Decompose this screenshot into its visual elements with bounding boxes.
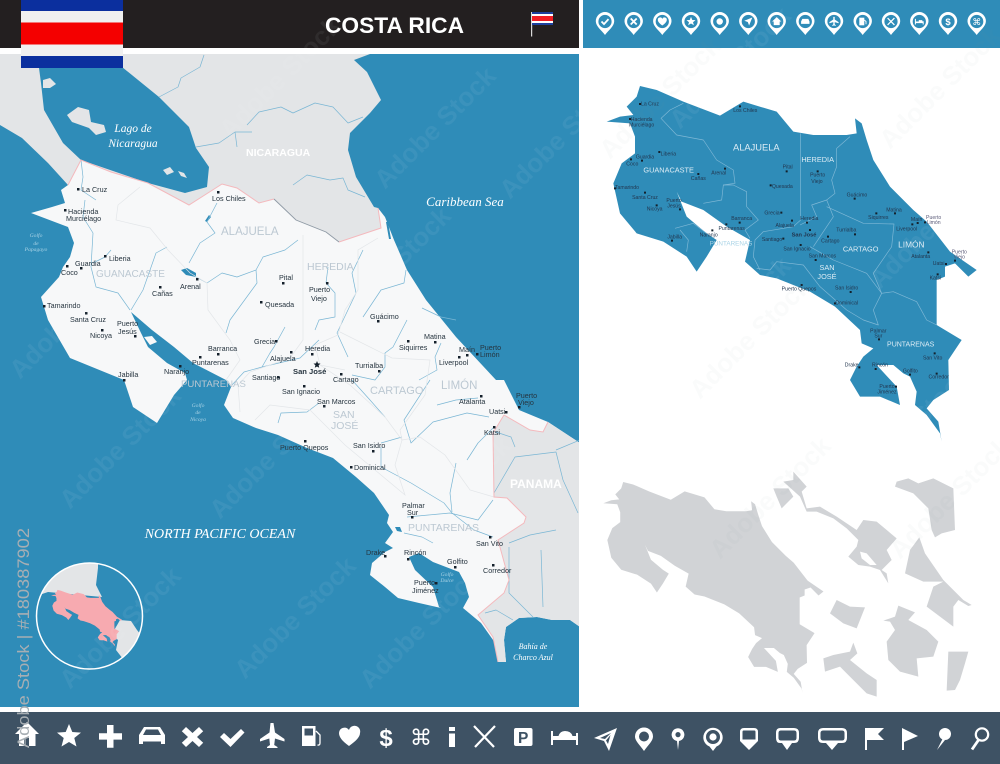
- city labels: Cartago: [821, 238, 840, 244]
- Nicaragua land: [0, 54, 381, 242]
- Rivers: [81, 55, 580, 620]
- city labels: Turrialba: [836, 228, 857, 234]
- City labels: La Cruz: [82, 185, 108, 194]
- City labels: Limón: [480, 350, 500, 359]
- City labels: Palmar: [402, 501, 425, 510]
- Capital star: [314, 361, 320, 368]
- watermark: Adobe Stock: [213, 10, 347, 144]
- city labels: Rincón: [872, 362, 888, 368]
- pin icons row: $: [945, 17, 951, 28]
- city labels: Guácimo: [847, 193, 867, 199]
- Sea labels: [24, 123, 554, 662]
- icon: speech bubble: [776, 728, 799, 750]
- Province labels: ALAJUELA: [221, 226, 279, 238]
- City labels: Atalanta: [459, 397, 485, 406]
- city markers: [614, 103, 956, 388]
- city labels: Liverpool: [896, 226, 917, 232]
- watermark: Adobe Stock: [323, 200, 457, 334]
- City labels: Matina: [424, 332, 446, 341]
- City labels: Jesús: [118, 327, 137, 336]
- city labels: Barranca: [731, 216, 752, 222]
- bottom icon bar: [0, 712, 1000, 764]
- city labels: Puerto: [879, 384, 895, 390]
- city labels: Drake: [845, 362, 859, 368]
- province labels: PUNTARENAS: [710, 241, 752, 248]
- Province labels: PUNTARENAS: [181, 379, 246, 390]
- icon: car: [139, 727, 165, 744]
- City labels: Puerto: [516, 391, 537, 400]
- city labels: Liberia: [661, 151, 676, 157]
- panel: main map: [0, 54, 580, 707]
- Sea labels: Nicaragua: [107, 138, 158, 150]
- icon: home: [15, 722, 39, 746]
- icon: target pin: [703, 728, 723, 751]
- City labels: Turrialba: [355, 361, 383, 370]
- bottom icons row: [15, 722, 988, 752]
- city labels: Quesada: [772, 184, 793, 190]
- City labels: Los Chiles: [212, 194, 246, 203]
- Sea labels: Bahía de: [519, 642, 548, 651]
- city labels: Sur: [874, 333, 883, 339]
- watermark: Adobe Stock: [593, 30, 727, 164]
- City labels: Grecia: [254, 337, 275, 346]
- city labels: [615, 102, 967, 395]
- Small water bodies: [181, 215, 402, 532]
- small flag icon: [531, 12, 553, 36]
- province labels: SAN: [819, 263, 835, 272]
- icon: notched flag: [865, 728, 884, 750]
- Province labels: CARTAGO: [370, 385, 424, 397]
- province borders: [661, 103, 937, 325]
- city labels: Katsi: [930, 276, 941, 282]
- Province labels: LIMÓN: [441, 379, 477, 392]
- city labels: Limón: [927, 220, 941, 226]
- watermark: Adobe Stock: [663, 250, 797, 384]
- panel: blue provinces map: [607, 86, 977, 442]
- watermark: Adobe Stock: [663, 0, 797, 134]
- city labels: Puerto: [666, 198, 682, 204]
- top-right pin bar: [583, 0, 1000, 48]
- Sea labels: Golfo: [441, 571, 454, 578]
- icon: parking: P: [518, 730, 528, 747]
- province labels: GUANACASTE: [643, 166, 694, 175]
- city labels: Pital: [783, 165, 793, 171]
- city labels: Puerto: [952, 249, 967, 255]
- city labels: Atalanta: [911, 254, 930, 260]
- city labels: Golfito: [903, 368, 918, 374]
- city labels: Matina: [886, 207, 902, 213]
- City labels: Santa Cruz: [70, 315, 106, 324]
- pin icons row: [596, 12, 986, 35]
- city labels: Heredia: [800, 216, 818, 222]
- city labels: San José: [792, 232, 816, 238]
- City labels: San Marcos: [317, 397, 356, 406]
- province labels: [643, 143, 935, 349]
- watermark: Adobe Stock: [683, 270, 817, 404]
- city labels: Grecia: [764, 210, 780, 216]
- city labels: Uatsi: [933, 261, 945, 267]
- city labels: Jesús: [667, 203, 681, 209]
- City labels: Liverpool: [439, 358, 469, 367]
- Sea labels: Nicoya: [189, 417, 206, 423]
- city labels: San Vito: [923, 355, 942, 361]
- city labels: Arenal: [711, 171, 726, 177]
- icon: check: [220, 729, 244, 747]
- City labels: Corredor: [483, 566, 512, 575]
- city labels: Los Chiles: [733, 108, 758, 114]
- icon: dollar: $: [379, 725, 393, 752]
- city labels: La Cruz: [641, 102, 659, 108]
- watermark: Adobe Stock: [353, 560, 487, 694]
- City labels: Golfito: [447, 557, 468, 566]
- City labels: Siquirres: [399, 343, 428, 352]
- pin icons row: ⌘: [972, 18, 981, 28]
- city labels: Palmar: [870, 328, 887, 334]
- city labels: Alajuela: [775, 223, 794, 229]
- city labels: Coco: [626, 161, 638, 167]
- city labels: Murciélago: [629, 123, 654, 129]
- Province labels: SAN: [333, 409, 355, 421]
- icon: square pin: [740, 728, 758, 750]
- province labels: JOSÉ: [817, 272, 837, 281]
- City labels: Puerto: [414, 578, 435, 587]
- sea background: [0, 54, 579, 707]
- city labels: Santa Cruz: [632, 195, 658, 201]
- City labels: Hacienda: [68, 207, 98, 216]
- city labels: Hacienda: [631, 117, 653, 123]
- Sea labels: Golfo: [30, 232, 43, 239]
- icon: pennant flag: [902, 728, 918, 750]
- Sea labels: Caribbean Sea: [426, 194, 504, 209]
- City labels: Naranjo: [164, 367, 189, 376]
- City labels: Nicoya: [90, 331, 112, 340]
- icon: fuel pump: [302, 726, 316, 746]
- watermark: Adobe Stock: [703, 430, 837, 564]
- Locator inset: [36, 562, 144, 670]
- watermark: Adobe Stock: [863, 160, 997, 294]
- city labels: Santiago: [762, 237, 782, 243]
- city labels: Jabilla: [667, 234, 682, 240]
- City labels: Pital: [279, 273, 293, 282]
- city labels: Puerto: [926, 215, 941, 221]
- city labels: San Isidro: [835, 285, 858, 291]
- City labels: Tamarindo: [47, 301, 81, 310]
- province labels: CARTAGO: [843, 245, 879, 254]
- City labels: Santiago: [252, 373, 280, 382]
- City labels: Katsi: [484, 428, 500, 437]
- Sea labels: Golfo: [192, 402, 205, 409]
- Province borders: [116, 187, 494, 497]
- province labels: HEREDIA: [801, 155, 834, 164]
- City labels: Arenal: [180, 282, 201, 291]
- City labels: Viejo: [311, 294, 327, 303]
- watermark: Adobe Stock: [3, 250, 137, 384]
- City labels: Alajuela: [270, 354, 296, 363]
- Province labels: HEREDIA: [307, 261, 354, 273]
- icon: wide speech bubble: [818, 728, 847, 750]
- City labels: Heredia: [305, 344, 330, 353]
- city labels: Maín: [911, 217, 923, 223]
- City labels: Guardia: [75, 259, 101, 268]
- City labels: Cartago: [333, 375, 359, 384]
- City labels: San Ignacio: [282, 387, 320, 396]
- City labels: Viejo: [518, 398, 534, 407]
- City markers: [43, 188, 520, 584]
- city labels: Viejo: [811, 179, 823, 185]
- watermark: Adobe Stock: [53, 380, 187, 514]
- Costa Rica land: [31, 160, 580, 662]
- city labels: Nicoya: [647, 207, 663, 213]
- city labels: Naranjo: [700, 233, 718, 239]
- Country labels: [246, 147, 562, 491]
- watermark: Adobe Stock: [203, 390, 337, 524]
- Province labels: [96, 226, 479, 534]
- vertical stock id: Adobe Stock | #180387902: [14, 528, 33, 748]
- city labels: San Marcos: [809, 253, 837, 259]
- province labels: PUNTARENAS: [887, 342, 935, 349]
- City labels: Maín: [459, 345, 475, 354]
- City labels: Puerto: [480, 343, 501, 352]
- icon: small pin: [672, 728, 684, 750]
- City labels: Jabilla: [118, 370, 138, 379]
- Lake and island details: [43, 78, 187, 178]
- Sea labels: Papagayo: [24, 247, 48, 253]
- icon: map pin: [635, 728, 653, 751]
- watermark: Adobe Stock: [228, 550, 362, 684]
- Country labels: PANAMA: [510, 477, 562, 491]
- City labels: Quesada: [265, 300, 294, 309]
- City labels: Puntarenas: [192, 358, 229, 367]
- province labels: LIMÓN: [898, 240, 925, 250]
- City labels: Barranca: [208, 344, 237, 353]
- icon: command key: ⌘: [410, 726, 432, 751]
- city labels: San Ignacio: [783, 246, 811, 252]
- City labels: San Isidro: [353, 441, 385, 450]
- city labels: Jiménez: [877, 389, 897, 395]
- icon: fork and knife: [474, 726, 495, 747]
- Sea labels: de: [33, 241, 39, 247]
- watermark: Adobe Stock: [493, 70, 627, 204]
- City labels: Puerto: [309, 285, 330, 294]
- Country labels: NICARAGUA: [246, 147, 311, 159]
- city labels: Guardia: [636, 154, 654, 160]
- city labels: Cañas: [691, 176, 706, 182]
- Sea labels: Dulce: [439, 578, 454, 584]
- watermark: Adobe Stock: [383, 430, 517, 564]
- city labels: Puerto: [810, 172, 825, 178]
- Sea labels: NORTH PACIFIC OCEAN: [144, 527, 296, 542]
- watermark: Adobe Stock: [53, 560, 187, 694]
- icon: heart: [339, 726, 360, 746]
- City labels: Uatsi: [489, 407, 506, 416]
- city labels: Dominical: [835, 301, 858, 307]
- panel: grey silhouette map: [603, 482, 823, 694]
- title: COSTA RICA: [325, 13, 464, 38]
- national flag: [21, 0, 123, 68]
- icon: navigation arrow: [594, 728, 617, 751]
- city labels: Puerto Quepos: [782, 287, 817, 293]
- icon: magnifier: [972, 728, 988, 750]
- Gulf island: [144, 336, 157, 345]
- Sea labels: Lago de: [113, 123, 152, 135]
- City labels: Guácimo: [370, 312, 399, 321]
- Province labels: GUANACASTE: [96, 269, 165, 280]
- icon: parking: [514, 728, 532, 747]
- City labels: Coco: [61, 268, 78, 277]
- icon: bed: [551, 731, 578, 745]
- city labels: Puntarenas: [718, 226, 745, 232]
- watermark: Adobe Stock: [843, 360, 977, 494]
- City labels: San José: [293, 367, 326, 376]
- icon: push pin: [937, 728, 951, 750]
- city labels: Corredor: [928, 375, 949, 381]
- Province labels: JOSÉ: [331, 419, 358, 432]
- City labels: Sur: [407, 508, 419, 517]
- province labels: ALAJUELA: [733, 143, 780, 153]
- City labels: Liberia: [109, 254, 131, 263]
- City labels: Dominical: [354, 463, 386, 472]
- watermark: Adobe Stock: [368, 60, 502, 194]
- Sea labels: de: [195, 410, 201, 416]
- City labels: Puerto Quepos: [280, 443, 329, 452]
- icon: info: [449, 727, 455, 747]
- icon: plane: [260, 723, 284, 748]
- panel: grey province pieces: [773, 472, 972, 697]
- City labels: Drake: [366, 548, 385, 557]
- Panama land: [478, 415, 580, 662]
- city labels: Tamarindo: [615, 185, 639, 191]
- City labels: Jiménez: [412, 586, 439, 595]
- City labels: Cañas: [152, 289, 173, 298]
- header bar: [0, 0, 579, 48]
- icon: plus: [99, 725, 122, 748]
- icon: cross: [182, 727, 203, 747]
- city labels: Siquirres: [868, 215, 889, 221]
- City labels: [47, 185, 537, 595]
- City labels: San Vito: [476, 539, 503, 548]
- City labels: Murciélago: [66, 214, 101, 223]
- City labels: Puerto: [117, 319, 138, 328]
- International border: [68, 160, 548, 662]
- icon: star: [57, 724, 81, 746]
- Sea labels: Charco Azul: [513, 653, 554, 662]
- city labels: Viejo: [954, 255, 965, 261]
- City labels: Rincón: [404, 548, 426, 557]
- Province labels: PUNTARENAS: [408, 522, 479, 534]
